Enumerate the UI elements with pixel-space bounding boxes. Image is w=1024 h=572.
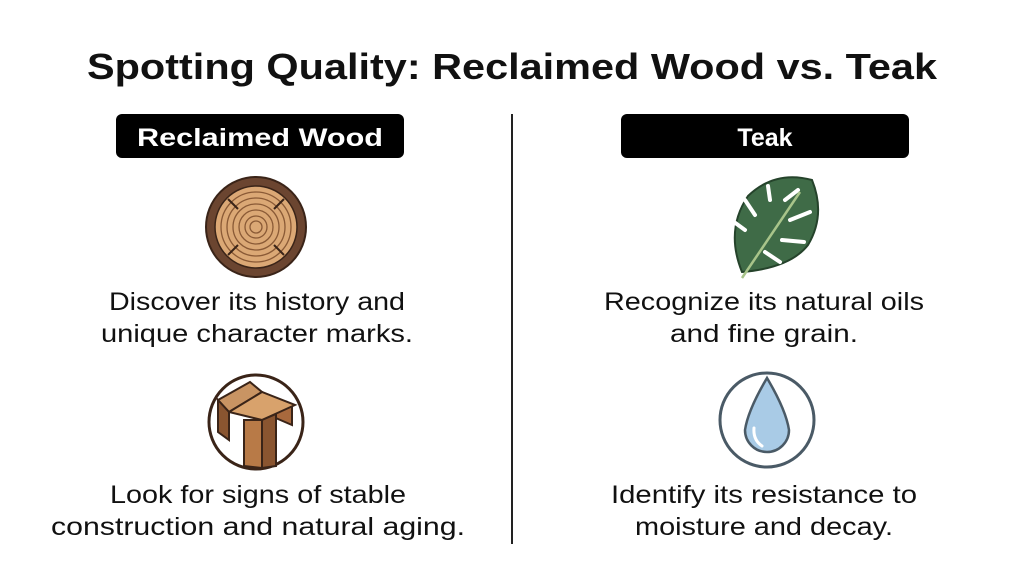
text: oils: and fine grain. xyxy=(670,320,858,348)
text: moisture: Identify its resistance to xyxy=(611,481,917,509)
icon: water drop xyxy=(720,373,814,467)
heading: teak: Teak xyxy=(737,124,793,152)
title: Spotting Quality: Reclaimed Wood vs. Teak xyxy=(87,46,938,87)
panel: reclaimed wood xyxy=(51,114,465,541)
heading: teak xyxy=(621,114,909,158)
text: history xyxy=(101,288,413,348)
text: history: unique character marks. xyxy=(101,320,413,348)
icon: wood joint xyxy=(209,375,303,469)
text: history: Discover its history and xyxy=(109,288,405,316)
icon: log cross-section xyxy=(206,177,306,277)
text: construction: construction and natural aging. xyxy=(51,513,465,541)
text: oils: Recognize its natural oils xyxy=(604,288,924,316)
heading: reclaimed wood: Reclaimed Wood xyxy=(137,124,383,152)
panel: teak xyxy=(604,114,924,541)
text: oils xyxy=(604,288,924,348)
icon: leaf xyxy=(734,177,818,278)
text: moisture: moisture and decay. xyxy=(635,513,893,541)
text: construction xyxy=(51,481,465,541)
text: construction: Look for signs of stable xyxy=(110,481,406,509)
heading: reclaimed wood xyxy=(116,114,404,158)
text: moisture xyxy=(611,481,917,541)
